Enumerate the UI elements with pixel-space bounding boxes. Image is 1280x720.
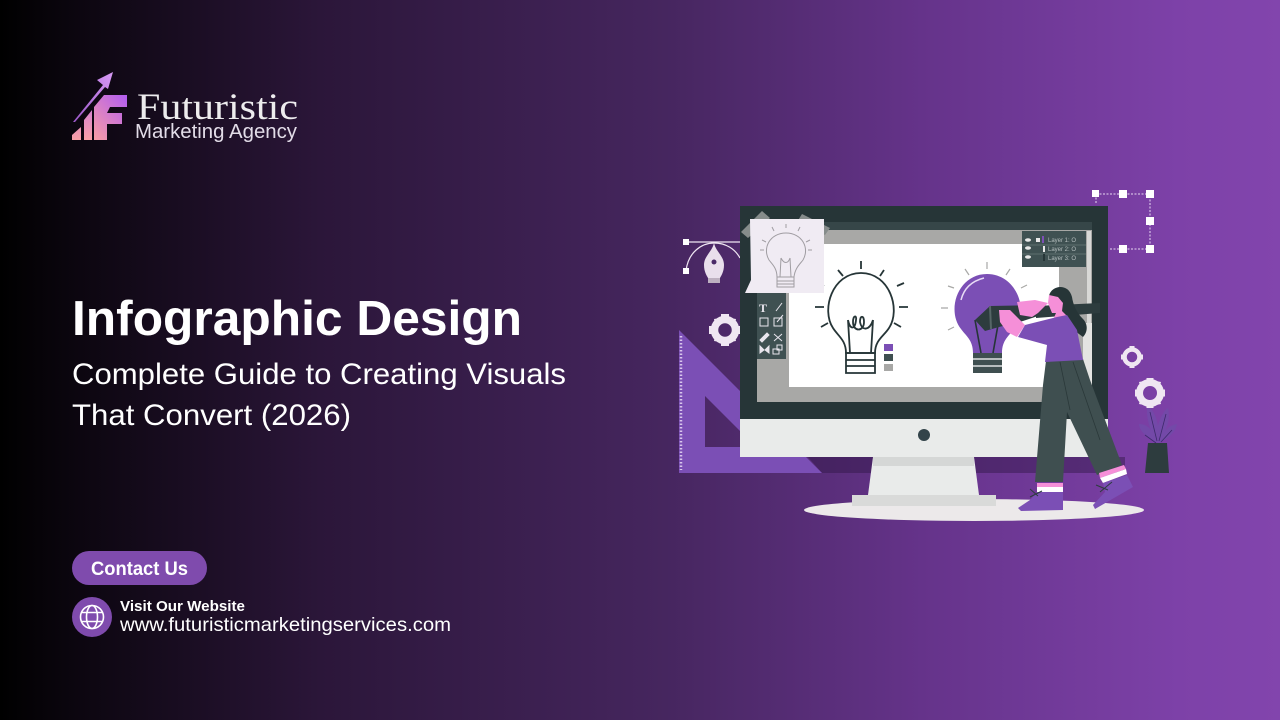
subtitle: Complete Guide to Creating Visuals — [72, 358, 566, 391]
logo: Futuristic Marketing Agency — [72, 72, 298, 143]
colour swatches — [884, 344, 893, 371]
hair — [1049, 287, 1087, 337]
toolbar: T — [759, 301, 767, 315]
lens cone — [975, 305, 1050, 331]
illustration: designer at monitor — [679, 190, 1177, 521]
contact button: Contact Us — [91, 559, 188, 580]
icon: logo bars — [72, 110, 92, 140]
woman designer — [975, 287, 1133, 511]
right sock — [1099, 465, 1126, 478]
dark bar behind figure — [1036, 303, 1100, 318]
left shoe — [1018, 492, 1063, 511]
layers panel: Layer 3: O — [1048, 256, 1076, 262]
subtitle: That Convert (2026) — [72, 399, 351, 432]
contact button — [72, 551, 207, 585]
monitor bezel — [740, 206, 1108, 419]
monitor — [740, 206, 1144, 521]
plant pot — [1139, 405, 1177, 473]
logo tagline: Marketing Agency — [135, 121, 297, 143]
trouser creases — [1060, 362, 1100, 440]
selection box handles — [1092, 190, 1154, 253]
scrollbar — [1087, 231, 1091, 323]
sweater — [1018, 315, 1083, 362]
light bulb outline — [815, 261, 908, 373]
icon: logo letter F — [94, 95, 127, 140]
ruler triangle — [679, 330, 822, 473]
left sock — [1037, 483, 1063, 487]
trousers — [1035, 359, 1122, 482]
floor ellipse — [804, 499, 1144, 521]
right shoe — [1093, 475, 1133, 509]
icon: large gear right — [1135, 378, 1165, 408]
icon: small gear right — [1121, 346, 1143, 368]
screen frame — [757, 230, 1092, 402]
lens ridge — [990, 306, 991, 329]
icon: globe — [72, 597, 112, 637]
upper hand — [1017, 300, 1048, 317]
canvas — [789, 244, 1059, 387]
icon: logo arrow — [73, 72, 113, 122]
monitor base — [852, 495, 996, 506]
sticky note with tape — [741, 211, 830, 293]
website block: www.futuristicmarketingservices.com — [119, 614, 451, 636]
toolbar — [757, 293, 786, 359]
website block — [119, 599, 451, 636]
shoe laces — [1030, 482, 1112, 497]
power button — [918, 429, 930, 441]
subtitle — [72, 358, 566, 432]
face and neck — [1048, 295, 1067, 322]
title: Infographic Design — [72, 292, 522, 346]
purple bulb — [941, 262, 1027, 373]
monitor stand — [868, 457, 979, 495]
logo name: Futuristic — [137, 87, 298, 128]
monitor chin — [740, 419, 1108, 457]
layers panel — [1022, 231, 1086, 267]
icon: pen tool — [683, 239, 740, 283]
layers panel: Layer 1: O — [1048, 238, 1076, 244]
icon: gear left — [709, 314, 741, 346]
floor band — [808, 457, 1125, 473]
lower hand — [999, 310, 1025, 337]
layers panel: Layer 2: O — [1048, 247, 1076, 253]
website block: Visit Our Website — [120, 599, 245, 615]
